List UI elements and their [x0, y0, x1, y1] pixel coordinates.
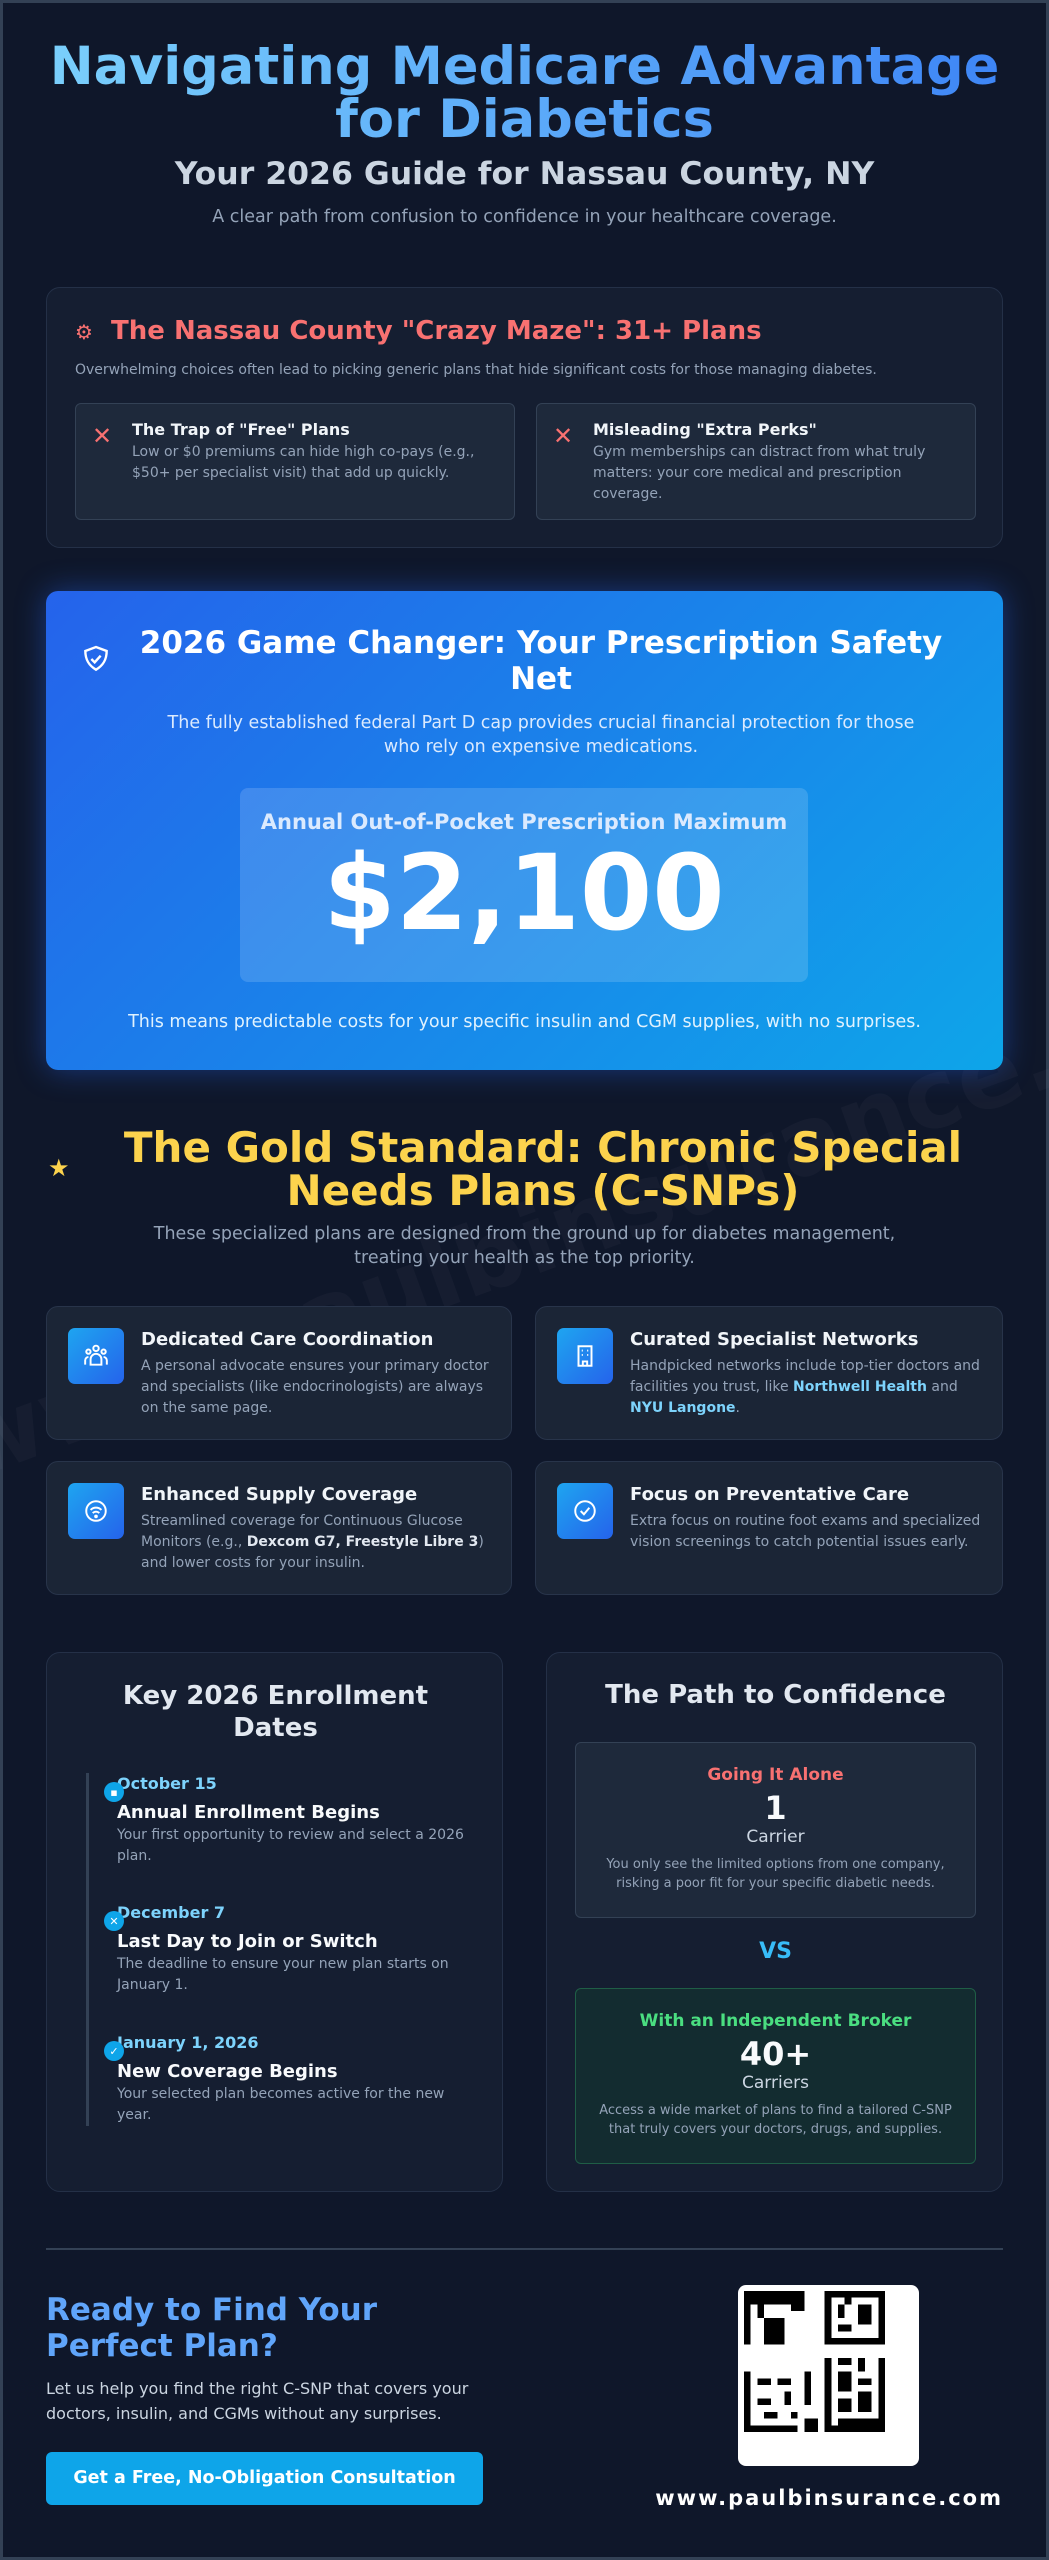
timeline item 2: December 7 — [117, 1903, 225, 1922]
button — [46, 2452, 483, 2505]
panel: path to confidence — [546, 1652, 1003, 2192]
heading: Dates — [233, 1713, 318, 1743]
card: supply coverage: Enhanced Supply Coverage — [141, 1484, 417, 1505]
button: Get a Free, No-Obligation Consultation — [73, 2468, 456, 2488]
vs: VS — [759, 1939, 792, 1964]
sub-card: free plans: Low or $0 premiums can hide high co-pays (e.g., $50+ per specialist visit) that add up quickly. — [132, 444, 474, 481]
card: care coordination: A personal advocate ensures your primary doctor and specialists (like endocrinologists) are always on the same page. — [141, 1358, 489, 1416]
card: specialist networks: Curated Specialist Networks — [630, 1329, 918, 1350]
website url: www.paulbinsurance.com — [655, 2486, 1003, 2510]
tagline: A clear path from confusion to confidence in your healthcare coverage. — [212, 207, 837, 227]
heading — [123, 1681, 428, 1743]
box: independent broker — [575, 1988, 976, 2164]
sub-card: free plans: The Trap of "Free" Plans — [132, 420, 350, 439]
sub-card: extra perks — [536, 403, 976, 520]
timeline item 3: January 1, 2026 — [117, 2033, 259, 2052]
card: supply coverage: Streamlined coverage for Continuous Glucose Monitors (e.g., Dexcom G7, Freestyle Libre 3) and lower costs for your insulin. — [141, 1513, 484, 1571]
panel: crazy maze — [46, 287, 1003, 548]
title — [0, 40, 1049, 146]
cta heading — [46, 2292, 377, 2364]
stat box: $2,100 — [323, 832, 725, 954]
timeline item 2: Last Day to Join or Switch — [117, 1931, 378, 1952]
box: going it alone: Going It Alone — [707, 1765, 844, 1785]
heading: The Path to Confidence — [605, 1680, 946, 1710]
panel: enrollment dates: ✕ — [109, 1914, 119, 1928]
box: going it alone: risking a poor fit for your specific diabetic needs. — [616, 1876, 935, 1891]
card: care coordination: Dedicated Care Coordination — [141, 1329, 433, 1350]
box: going it alone — [575, 1742, 976, 1918]
description: treating your health as the top priority. — [354, 1248, 695, 1268]
box: independent broker: 40+ — [740, 2035, 811, 2073]
timeline item 1: Annual Enrollment Begins — [117, 1802, 380, 1823]
sub-card: extra perks: ✕ — [553, 422, 573, 450]
description: The fully established federal Part D cap provides crucial financial protection for those — [168, 713, 914, 733]
card: specialist networks: Handpicked networks include top-tier doctors and facilities you trust, like Northwell Health and NYU Langone. — [630, 1358, 980, 1416]
timeline item 3: Your selected plan becomes active for the new year. — [117, 2086, 444, 2123]
heading — [140, 625, 942, 697]
timeline item 3: New Coverage Begins — [117, 2061, 338, 2082]
card: preventative care: Extra focus on routine foot exams and specialized vision screenings to catch potential issues early. — [630, 1513, 980, 1550]
heading: gold standard: Needs Plans (C-SNPs) — [287, 1166, 799, 1215]
icon: check — [557, 1483, 613, 1539]
box: going it alone: You only see the limited options from one company, — [606, 1857, 945, 1872]
box: independent broker: Carriers — [742, 2073, 809, 2093]
icon: sensor — [68, 1483, 124, 1539]
panel: enrollment dates: ▪ — [110, 1786, 118, 1798]
description — [154, 1224, 895, 1268]
card: preventative care — [535, 1461, 1003, 1595]
card: supply coverage — [46, 1461, 512, 1595]
sub-card: extra perks: Gym memberships can distract from what truly matters: your core medical and prescription coverage. — [593, 444, 925, 502]
icon: star: ★ — [48, 1154, 70, 1182]
heading: crazy maze: ⚙ The Nassau County "Crazy Maze": 31+ Plans — [75, 316, 762, 346]
heading: 2026 Game Changer: Your Prescription Safety — [140, 625, 942, 661]
timeline item 1: October 15 — [117, 1774, 217, 1793]
cta text: Let us help you find the right C-SNP that covers your doctors, insulin, and CGMs without any surprises. — [46, 2379, 468, 2423]
icon: shield — [84, 646, 108, 672]
panel: prescription safety net — [46, 591, 1003, 1070]
footnote: This means predictable costs for your specific insulin and CGM supplies, with no surprises. — [128, 1012, 921, 1032]
timeline item 2 — [104, 1903, 449, 1993]
title: Navigating Medicare Advantage — [50, 36, 999, 97]
title: for Diabetics — [335, 89, 714, 150]
timeline item 3 — [104, 2033, 444, 2123]
sub-card: extra perks: Misleading "Extra Perks" — [593, 420, 817, 439]
panel: enrollment dates — [46, 1652, 503, 2192]
heading: gold standard — [124, 1123, 962, 1215]
card: care coordination — [46, 1306, 512, 1440]
icon: people — [68, 1328, 124, 1384]
stat box — [240, 788, 808, 982]
icon: building — [557, 1328, 613, 1384]
box: independent broker: With an Independent Broker — [640, 2011, 911, 2031]
heading: gold standard: The Gold Standard: Chronic Special — [124, 1123, 962, 1172]
stat box: Annual Out-of-Pocket Prescription Maximum — [261, 810, 787, 834]
heading: Net — [510, 661, 572, 697]
sub-card: free plans — [75, 403, 515, 520]
timeline item 2: The deadline to ensure your new plan starts on January 1. — [117, 1956, 449, 1993]
panel: enrollment dates: ✓ — [109, 2044, 119, 2058]
subtitle: Your 2026 Guide for Nassau County, NY — [175, 156, 874, 192]
description: who rely on expensive medications. — [384, 737, 698, 757]
box: going it alone: Carrier — [746, 1827, 805, 1847]
box: independent broker: that truly covers your doctors, drugs, and supplies. — [609, 2122, 942, 2137]
heading: Key 2026 Enrollment — [123, 1681, 428, 1711]
qr code — [738, 2285, 919, 2466]
description: Overwhelming choices often lead to picking generic plans that hide significant costs for those managing diabetes. — [75, 362, 877, 378]
cta heading: Ready to Find Your — [46, 2292, 377, 2328]
timeline line — [86, 1773, 89, 2126]
box: going it alone: 1 — [764, 1789, 787, 1827]
description — [167, 713, 914, 757]
description: These specialized plans are designed from the ground up for diabetes management, — [154, 1224, 895, 1244]
card: specialist networks — [535, 1306, 1003, 1440]
sub-card: free plans: ✕ — [92, 422, 112, 450]
card: preventative care: Focus on Preventative Care — [630, 1484, 909, 1505]
box: independent broker: Access a wide market of plans to find a tailored C-SNP — [599, 2103, 952, 2118]
timeline item 1 — [104, 1774, 464, 1864]
cta heading: Perfect Plan? — [46, 2328, 278, 2364]
timeline item 1: Your first opportunity to review and select a 2026 plan. — [117, 1827, 464, 1864]
